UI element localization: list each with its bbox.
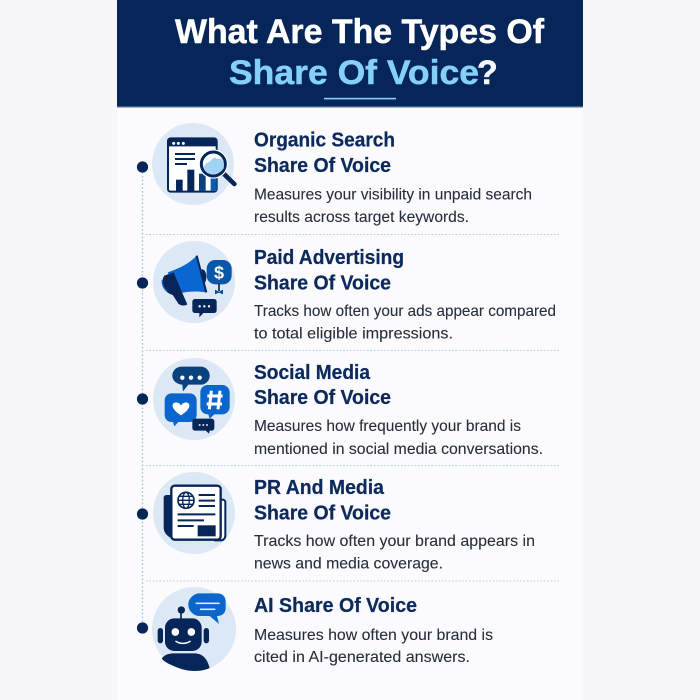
title header: What Are The Types Of bbox=[175, 13, 545, 51]
icon: megaphone with dollar badge bbox=[153, 241, 235, 323]
timeline dot 3 bbox=[137, 393, 148, 405]
timeline dot 1 bbox=[137, 161, 148, 173]
timeline dot 5 bbox=[137, 622, 148, 634]
heading: paid advertising bbox=[254, 247, 404, 294]
icon: megaphone with dollar badge: $ bbox=[214, 263, 224, 283]
description: ai share of voice: Measures how often your brand is bbox=[254, 627, 493, 644]
heading: social media: Share Of Voice bbox=[254, 387, 391, 409]
description: pr and media: news and media coverage. bbox=[254, 556, 443, 572]
description: organic search: results across target keywords. bbox=[254, 209, 469, 226]
heading: pr and media bbox=[254, 477, 391, 524]
description: organic search bbox=[254, 186, 532, 226]
description: ai share of voice bbox=[254, 627, 493, 666]
heading: organic search: Organic Search bbox=[254, 130, 395, 152]
icon: social chat bubbles bbox=[153, 358, 235, 440]
heading: social media: Social Media bbox=[254, 362, 371, 384]
timeline dot 4 bbox=[137, 508, 148, 520]
description: social media: mentioned in social media conversations. bbox=[254, 441, 543, 458]
panel: social media bbox=[137, 358, 543, 458]
panel: pr and media bbox=[137, 472, 535, 572]
description: paid advertising bbox=[254, 303, 556, 342]
description: organic search: Measures your visibility in unpaid search bbox=[254, 186, 532, 204]
description: social media: Measures how frequently your brand is bbox=[254, 418, 521, 435]
timeline dot 2 bbox=[137, 277, 148, 289]
panel: organic search bbox=[137, 123, 532, 226]
heading: organic search bbox=[254, 130, 395, 177]
title header: ? bbox=[477, 54, 498, 92]
title header: Share Of Voice bbox=[229, 54, 479, 92]
heading: pr and media: PR And Media bbox=[254, 477, 385, 499]
heading: organic search: Share Of Voice bbox=[254, 155, 391, 177]
icon: robot with chat bubble bbox=[152, 587, 236, 671]
description: ai share of voice: cited in AI-generated answers. bbox=[254, 649, 470, 666]
description: social media bbox=[254, 418, 543, 458]
heading: pr and media: Share Of Voice bbox=[254, 502, 391, 524]
icon: newspaper with globe bbox=[153, 472, 235, 554]
card background bbox=[117, 0, 583, 700]
panel: ai share of voice bbox=[137, 587, 493, 671]
icon: organic search window and magnifier bbox=[152, 123, 234, 205]
heading: paid advertising: Share Of Voice bbox=[254, 272, 391, 294]
panel: paid advertising bbox=[137, 241, 556, 342]
title header bbox=[117, 0, 583, 108]
heading: social media bbox=[254, 362, 391, 409]
description: pr and media: Tracks how often your brand appears in bbox=[254, 533, 535, 550]
timeline connector bbox=[142, 172, 561, 624]
heading: ai share of voice: AI Share Of Voice bbox=[254, 595, 417, 617]
description: paid advertising: Tracks how often your ads appear compared bbox=[254, 303, 556, 320]
description: pr and media bbox=[254, 533, 535, 572]
heading: paid advertising: Paid Advertising bbox=[254, 247, 404, 269]
description: paid advertising: to total eligible impressions. bbox=[254, 326, 453, 342]
